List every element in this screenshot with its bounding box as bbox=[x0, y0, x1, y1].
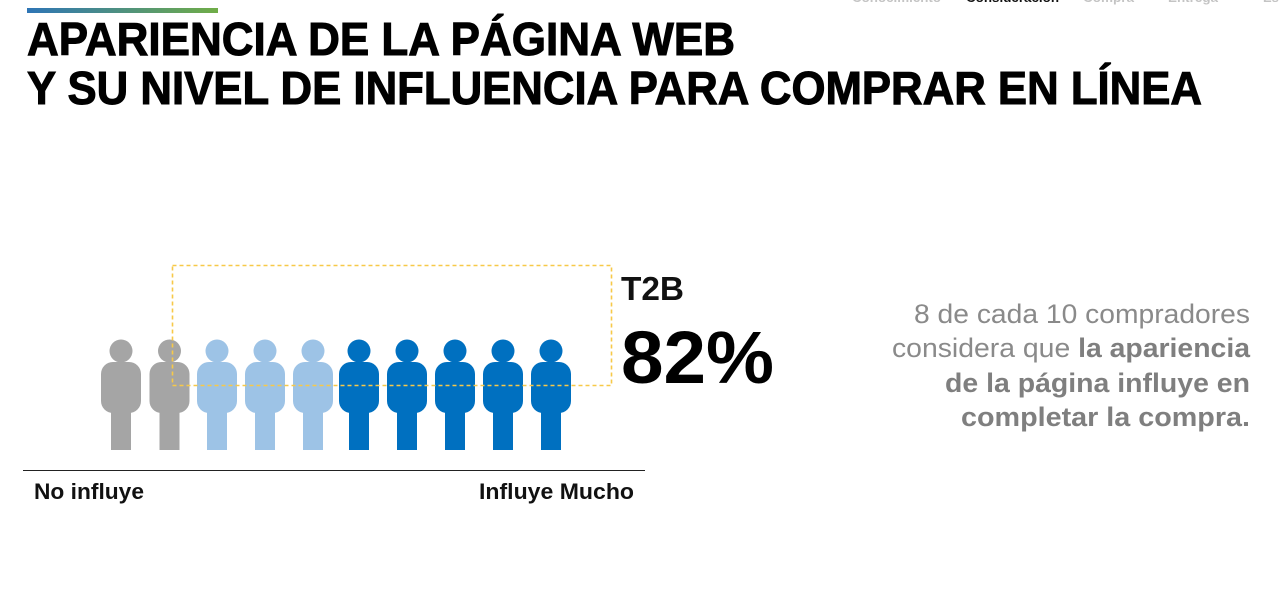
T2B value: 82% bbox=[621, 316, 774, 399]
navigation breadcrumb bbox=[852, 0, 1279, 5]
takeaway text: considera que la apariencia bbox=[892, 333, 1251, 363]
takeaway text: de la página influye en bbox=[945, 368, 1250, 398]
icons: people neutral bbox=[197, 340, 333, 450]
title bbox=[27, 13, 1202, 114]
icons: people no influye bbox=[101, 340, 190, 450]
takeaway text: 8 de cada 10 compradores bbox=[914, 299, 1250, 329]
axis label left: No influye bbox=[34, 479, 144, 504]
icons: people influye mucho bbox=[339, 340, 571, 450]
title: APARIENCIA DE LA PÁGINA WEB bbox=[27, 13, 735, 65]
title accent bar bbox=[27, 8, 218, 13]
title: Y SU NIVEL DE INFLUENCIA PARA COMPRAR EN LÍNEA bbox=[27, 62, 1202, 114]
pictogram: row of ten people bbox=[101, 340, 571, 450]
takeaway text bbox=[892, 299, 1251, 432]
T2B label: T2B bbox=[621, 270, 684, 307]
axis label right: Influye Mucho bbox=[479, 479, 634, 504]
takeaway text: completar la compra. bbox=[961, 402, 1250, 432]
scale axis line bbox=[23, 470, 645, 472]
dashed T2B highlight box bbox=[172, 266, 612, 386]
